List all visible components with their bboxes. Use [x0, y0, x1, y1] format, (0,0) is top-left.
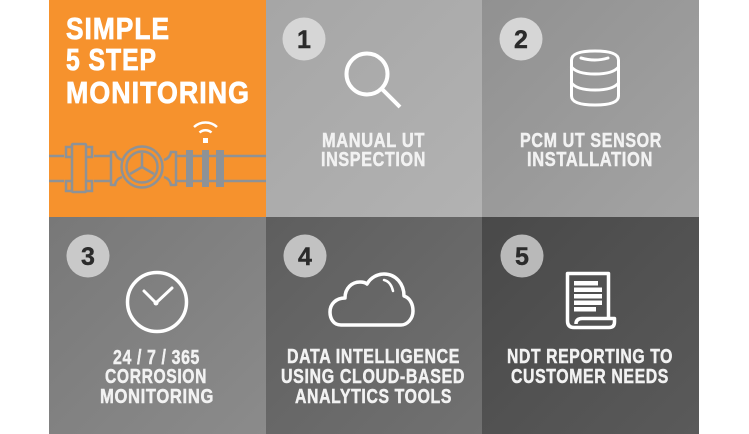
icon: cloud: [330, 274, 413, 325]
label: NDT reporting to customer needs: NDT REPORTING TO: [507, 345, 673, 368]
icon: sensor stack: [572, 51, 618, 105]
label: manual UT inspection: INSPECTION: [321, 148, 426, 171]
label: data intelligence using cloud-based analytics tools: [281, 345, 465, 408]
title: 5 STEP: [66, 42, 157, 77]
label: PCM UT sensor installation: PCM UT SENSOR: [520, 129, 662, 152]
panel: step 5: [482, 217, 699, 434]
label: data intelligence using cloud-based analytics tools: DATA INTELLIGENCE: [287, 345, 460, 368]
label: NDT reporting to customer needs: CUSTOMER NEEDS: [511, 365, 669, 388]
label: 24/7/365 corrosion monitoring: [100, 346, 214, 408]
label: PCM UT sensor installation: INSTALLATION: [527, 148, 653, 171]
panel: step 2: [482, 0, 699, 217]
label: PCM UT sensor installation: [520, 129, 662, 171]
label: data intelligence using cloud-based analytics tools: ANALYTICS TOOLS: [295, 385, 452, 408]
step number 2: 2: [514, 26, 528, 54]
label: 24/7/365 corrosion monitoring: MONITORING: [100, 385, 214, 408]
panel: step 1: [266, 0, 482, 217]
step number 1: 1: [297, 26, 311, 54]
label: NDT reporting to customer needs: [507, 345, 673, 388]
icon: clock: [128, 272, 186, 332]
label: manual UT inspection: MANUAL UT: [322, 129, 425, 152]
step number 3: 3: [81, 243, 95, 271]
panel: title: [49, 0, 266, 217]
panel: step 3: [49, 217, 266, 434]
step number 1: [282, 18, 326, 60]
icon: report document: [568, 274, 614, 328]
title: [66, 11, 250, 110]
label: 24/7/365 corrosion monitoring: 24 / 7 / 365: [113, 346, 200, 369]
step number 5: [500, 234, 544, 278]
step number 4: 4: [298, 243, 312, 271]
label: data intelligence using cloud-based analytics tools: USING CLOUD-BASED: [281, 365, 465, 388]
panel: step 4: [266, 217, 482, 434]
step number 5: 5: [515, 243, 529, 271]
step number 3: [66, 234, 110, 278]
label: manual UT inspection: [321, 129, 426, 171]
label: 24/7/365 corrosion monitoring: CORROSION: [105, 365, 207, 388]
pipeline with valve: [49, 144, 266, 192]
icon: magnifier: [346, 54, 400, 107]
icon: wifi signal: [194, 123, 217, 143]
title: MONITORING: [66, 75, 250, 110]
title: SIMPLE: [66, 11, 170, 46]
step number 2: [500, 18, 542, 60]
step number 4: [284, 234, 326, 278]
